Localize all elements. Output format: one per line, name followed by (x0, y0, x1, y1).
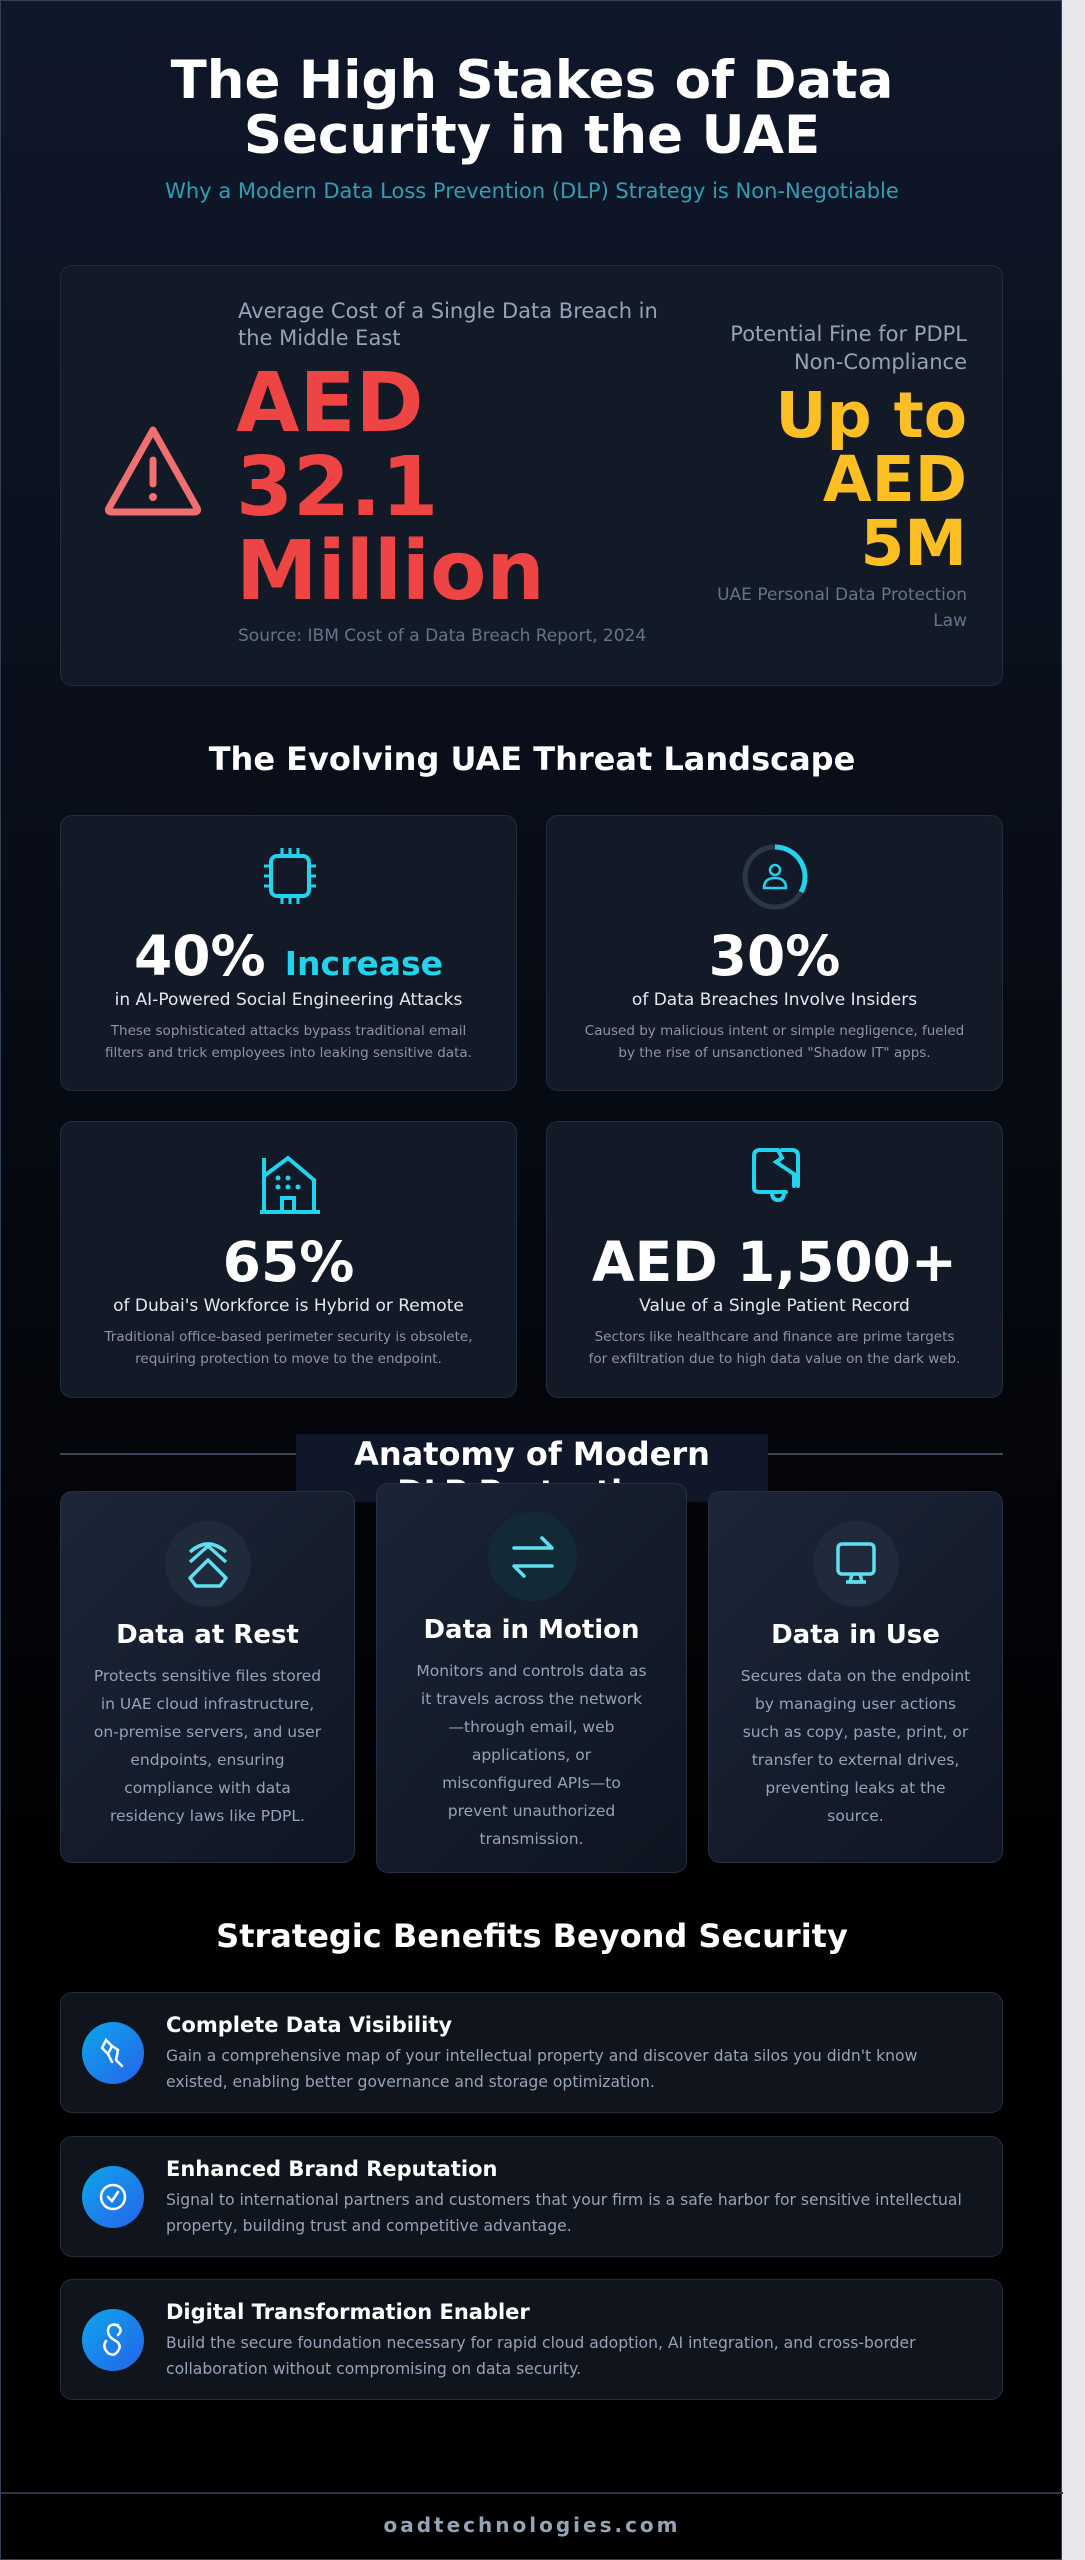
text: average cost label: Average Cost of a Single Data Breach in the Middle East (238, 299, 658, 350)
icon: chip (264, 848, 316, 904)
stat: AED 1,500+: AED 1,500+ (592, 1230, 957, 1294)
stat: 30%: 30% (709, 924, 840, 988)
stat: AED 32.1 Million: AED (236, 356, 424, 451)
heading: strategic benefits: Strategic Benefits Beyond Security (216, 1917, 848, 1955)
text: title: Digital Transformation Enabler (166, 2300, 530, 2324)
text: description (166, 2334, 916, 2378)
stat: Up to AED 5M: 5M (860, 507, 967, 580)
title: The High Stakes of Data (171, 50, 893, 111)
text: source: Source: IBM Cost of a Data Breach Report, 2024 (238, 626, 646, 646)
text: description: by the rise of unsanctioned "Shadow IT" apps. (618, 1045, 931, 1061)
panel: benefit reputation (60, 2136, 1003, 2257)
icon: broken tablet (752, 1148, 800, 1202)
heading: threat landscape: The Evolving UAE Threat Landscape (209, 740, 855, 778)
icon: person ring (742, 844, 808, 910)
icon: arrows circle (488, 1512, 577, 1601)
text: description: filters and trick employees into leaking sensitive data. (105, 1045, 472, 1061)
text: description: These sophisticated attacks bypass traditional email (111, 1023, 466, 1039)
text: description: Monitors and controls data as (416, 1662, 647, 1680)
panel: data at rest (60, 1491, 355, 1863)
icon: link (82, 2309, 144, 2371)
panel: data in use (708, 1491, 1003, 1863)
text: subtitle: Value of a Single Patient Record (639, 1296, 910, 1316)
text: description: Traditional office-based perimeter security is obsolete, (105, 1329, 472, 1345)
stat: Up to AED 5M: Up to (775, 379, 967, 452)
stat: Up to AED 5M: AED (823, 443, 967, 516)
text: description: for exfiltration due to high data value on the dark web. (589, 1351, 960, 1367)
stat: 65%: 65% (223, 1230, 354, 1294)
text: description: misconfigured APIs—to (442, 1774, 621, 1792)
subtitle: Why a Modern Data Loss Prevention (DLP) Strategy is Non-Negotiable (165, 179, 899, 203)
text: subtitle: in AI-Powered Social Engineering Attacks (115, 990, 462, 1010)
text: description: prevent unauthorized (448, 1802, 615, 1820)
stat: AED 32.1 Million: 32.1 (236, 440, 438, 535)
heading: anatomy: Anatomy of Modern (354, 1435, 710, 1473)
panel: hybrid workforce (60, 1121, 517, 1398)
text: description (588, 1329, 960, 1367)
icon: building (260, 1156, 320, 1214)
icon: visibility (82, 2022, 144, 2084)
text: description (166, 2047, 917, 2091)
text: description: existed, enabling better governance and storage optimization. (166, 2073, 655, 2091)
icon: layers circle (165, 1521, 251, 1607)
text: title: Data in Motion (423, 1615, 640, 1645)
text: description: requiring protection to move to the endpoint. (135, 1351, 442, 1367)
text: title: Data at Rest (116, 1620, 299, 1650)
heading: anatomy (296, 1434, 768, 1502)
text: PDPL law: UAE Personal Data Protection Law (717, 585, 967, 631)
title: Security in the UAE (244, 105, 820, 166)
text: description (104, 1329, 472, 1367)
text: description (105, 1023, 472, 1061)
panel: benefit transformation (60, 2279, 1003, 2400)
text: description: property, building trust and competitive advantage. (166, 2217, 572, 2235)
text: description: Signal to international partners and customers that your firm is a safe harbor for sensitive intellectual (166, 2191, 962, 2209)
panel: hero cost card (60, 265, 1003, 686)
stat: AED 32.1 Million: Million (236, 524, 545, 619)
stat: 40% increase: 40% Increase (134, 924, 443, 988)
text: subtitle: of Data Breaches Involve Insiders (632, 990, 917, 1010)
text: description: Sectors like healthcare and finance are prime targets (595, 1329, 954, 1345)
text: description (166, 2191, 962, 2235)
text: description: —through email, web (448, 1718, 614, 1736)
text: title: Enhanced Brand Reputation (166, 2157, 497, 2181)
text: description: Protects sensitive files stored in UAE cloud infrastructure, on-premise servers, and user endpoints, ensuring compliance with data residency laws like PDPL. (94, 1667, 321, 1825)
footer: website: oadtechnologies.com (383, 2513, 681, 2537)
text: description: Build the secure foundation necessary for rapid cloud adoption, AI integration, and cross-border (166, 2334, 916, 2352)
panel: insiders (546, 815, 1003, 1091)
panel: patient record (546, 1121, 1003, 1398)
text: description: it travels across the network (421, 1690, 642, 1708)
text: description: transmission. (480, 1830, 583, 1848)
stat: AED 32.1 Million (236, 356, 545, 619)
text: description: Gain a comprehensive map of your intellectual property and discover data silos you didn't know (166, 2047, 917, 2065)
icon: monitor circle (813, 1521, 899, 1607)
text: title: Data in Use (771, 1620, 940, 1650)
text: description (585, 1023, 964, 1061)
title (170, 50, 893, 166)
panel: data in motion (376, 1483, 687, 1873)
stat: Up to AED 5M (775, 379, 967, 580)
text: title: Complete Data Visibility (166, 2013, 452, 2037)
panel: AI attacks (60, 815, 517, 1091)
panel: benefit visibility (60, 1992, 1003, 2113)
text: description: Secures data on the endpoint by managing user actions such as copy, paste, print, or transfer to external drives, preventing leaks at the source. (741, 1667, 970, 1825)
icon: warning triangle (104, 426, 202, 516)
icon: check (82, 2166, 144, 2228)
text: description (416, 1662, 647, 1848)
text: description: collaboration without compromising on data security. (166, 2360, 581, 2378)
text: subtitle: of Dubai's Workforce is Hybrid or Remote (113, 1296, 464, 1316)
text: PDPL fine label: Potential Fine for PDPL Non-Compliance (730, 322, 967, 374)
text: description: Caused by malicious intent or simple negligence, fueled (585, 1023, 964, 1039)
text: description: applications, or (472, 1746, 591, 1764)
